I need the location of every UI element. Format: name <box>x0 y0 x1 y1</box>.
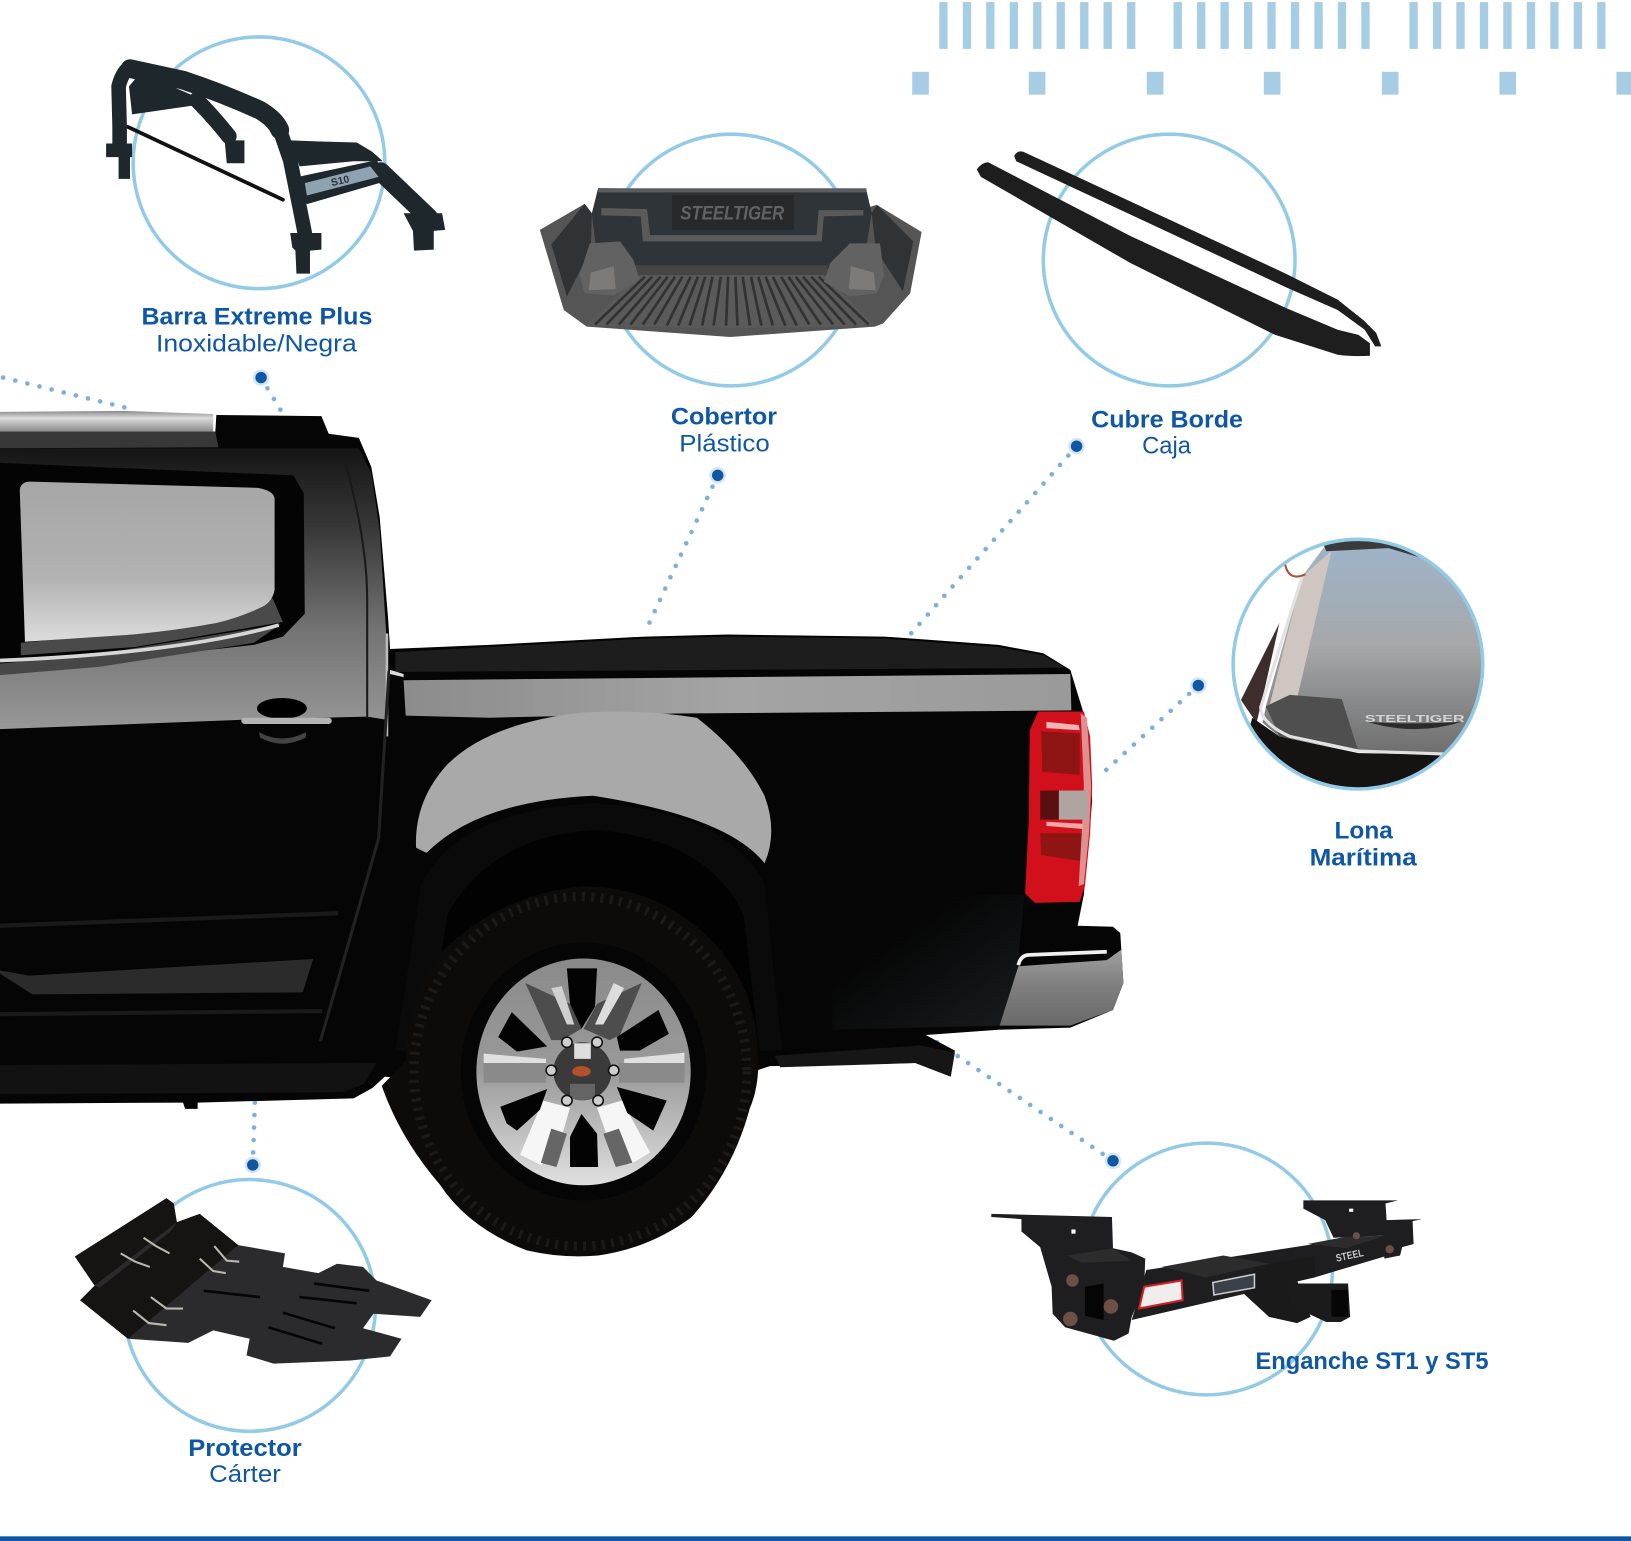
circle <box>133 37 385 289</box>
lower bed shading <box>832 895 1025 1030</box>
reverse lens <box>1059 791 1088 820</box>
web between legs <box>129 73 204 114</box>
badge <box>305 166 379 196</box>
chrome strip <box>0 625 279 661</box>
photo: tonneau cover <box>1241 541 1481 788</box>
cross beam <box>1132 1236 1384 1320</box>
lower spokes highlight <box>520 1100 570 1165</box>
marker <box>1068 438 1085 455</box>
panel: Enganche <box>991 1143 1488 1395</box>
panel: Protector Cárter <box>75 1157 432 1488</box>
receiver tube <box>1283 1284 1350 1322</box>
tire <box>382 886 758 1256</box>
heading: Protector <box>188 1435 302 1462</box>
subtitle: Cárter <box>209 1461 281 1488</box>
upper spoke shading <box>525 983 581 1040</box>
center mount <box>1244 1257 1315 1323</box>
ribbed floor <box>587 275 875 328</box>
badge: S10 <box>330 174 351 189</box>
roof strip <box>0 411 213 432</box>
wheel wells <box>579 241 640 295</box>
photo: tonneau cover: STEELTIGER <box>1365 714 1465 725</box>
wheel arch <box>395 803 782 1051</box>
heading: Barra Extreme Plus <box>141 304 372 331</box>
left bracket <box>991 1214 1145 1341</box>
icon: skid plate <box>75 1198 432 1364</box>
marker <box>253 369 269 386</box>
exhaust <box>775 1045 955 1077</box>
heading: Cubre Borde <box>1091 407 1243 434</box>
subtitle: Inoxidable/Negra <box>156 331 358 358</box>
heading: Lona <box>1335 817 1394 844</box>
panel: Cubre Borde <box>977 134 1381 460</box>
circle <box>605 134 857 386</box>
truck body <box>0 415 1123 1109</box>
marker <box>709 467 726 484</box>
side walls <box>551 204 592 296</box>
bed silver band <box>404 674 1071 718</box>
tonneau edge <box>395 637 1065 672</box>
left slot <box>1085 1284 1104 1320</box>
icon: tow hitch <box>991 1200 1422 1341</box>
tailgate wall <box>592 188 872 276</box>
right bracket <box>1303 1200 1422 1259</box>
heading: Enganche ST1 y ST5 <box>1255 1348 1488 1375</box>
rear window <box>20 482 275 642</box>
liner outline <box>540 188 922 337</box>
icon: roll bar <box>106 68 445 274</box>
panel: Cobertor <box>540 134 922 484</box>
tail light <box>1025 711 1092 903</box>
cab upper panel <box>0 448 387 729</box>
marker <box>1190 677 1207 694</box>
fender highlight <box>416 712 771 863</box>
circle <box>124 1180 376 1431</box>
window frame <box>0 463 305 666</box>
heading line 2: Marítima <box>1310 844 1417 871</box>
lower sill shadow <box>0 624 281 675</box>
rear bumper <box>1000 950 1123 1026</box>
door handle <box>241 698 332 744</box>
silver label <box>1213 1274 1254 1295</box>
logo plate: STEELTIGER <box>680 202 785 224</box>
subtitle: Caja <box>1142 433 1192 460</box>
side spokes <box>484 1063 546 1083</box>
door seam <box>320 463 389 1041</box>
icon: tow hitch: STEEL <box>1335 1248 1365 1265</box>
panel: Lona Marítima <box>1190 530 1487 871</box>
circle <box>1081 1143 1332 1395</box>
icon: bed liner <box>540 188 922 337</box>
pickup truck <box>0 411 1123 1256</box>
panel: Barra Extreme Plus <box>106 37 445 386</box>
mounting plates <box>1162 1255 1269 1277</box>
lower door panel <box>0 959 313 994</box>
marker <box>1105 1152 1121 1169</box>
side step <box>0 1063 377 1094</box>
heading: Cobertor <box>671 403 777 430</box>
circle <box>1043 134 1295 386</box>
marker <box>244 1157 261 1173</box>
connector lines <box>3 378 1198 1165</box>
bottom bar <box>0 1536 1631 1541</box>
wheel rim <box>476 959 691 1185</box>
logo plate <box>672 195 794 230</box>
decorative bar pattern <box>912 2 1631 95</box>
warning label <box>1139 1280 1183 1309</box>
subtitle: Plástico <box>679 430 770 457</box>
icon: bed rails <box>977 151 1381 356</box>
circle <box>1233 539 1483 789</box>
